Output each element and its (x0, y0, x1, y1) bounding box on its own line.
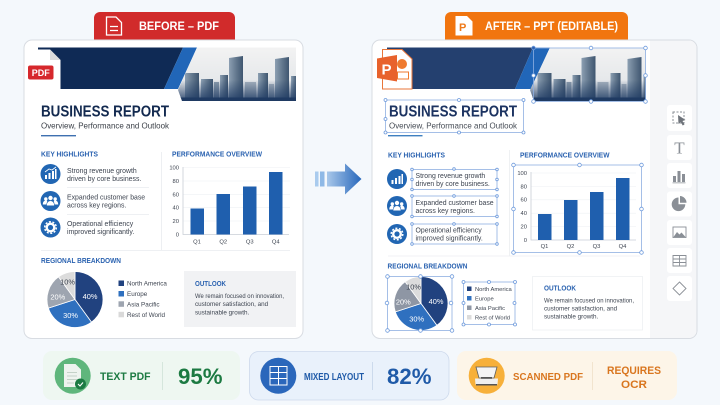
callout: outlook: sustainable growth. (195, 309, 250, 316)
banner: navy header (38, 48, 183, 89)
bar chart: performance: 0 (176, 232, 179, 238)
icon: shape (673, 282, 686, 295)
tab: after PPT: P (459, 22, 466, 34)
bar chart: performance, selected: 20 (521, 224, 527, 230)
highlight: revenue growth: driven by core business. (67, 176, 141, 183)
banner: navy header (387, 48, 533, 89)
callout: outlook: OUTLOOK (544, 284, 576, 292)
pie chart: regions, selected (385, 275, 454, 332)
icon: bar chart (672, 171, 686, 183)
legend: regions, selected: North America (475, 287, 513, 293)
legend: regions, selected (462, 280, 516, 326)
tab: before PDF (94, 12, 235, 40)
icon: scanner (469, 358, 505, 394)
highlight: customer base: across key regions. (416, 208, 475, 215)
callout: outlook: customer satisfaction, and (195, 301, 269, 308)
bar chart: performance: Q4 (272, 240, 280, 246)
badge: scanned PDF: SCANNED PDF (513, 372, 583, 383)
pie chart: regions: 20% (50, 292, 66, 302)
highlight: customer base: Expanded customer base (416, 200, 494, 207)
badge: mixed layout (250, 352, 449, 400)
callout: outlook: We remain focused on innovation, (195, 293, 284, 300)
highlight: revenue growth (387, 168, 498, 191)
bar chart: performance: 40 (173, 206, 179, 212)
bar chart: performance: Q2 (219, 240, 227, 246)
icon: image (673, 227, 686, 238)
heading: key highlights: KEY HIGHLIGHTS (41, 150, 98, 158)
subtitle: Overview, Performance and Outlook (41, 120, 170, 130)
bar chart: performance, selected: 40 (521, 211, 527, 217)
badge: text PDF: 95% (178, 364, 222, 389)
badge: scanned PDF: REQUIRES (607, 365, 661, 377)
pie chart: regions, selected: 40% (429, 297, 444, 306)
icon: text: T (674, 138, 685, 158)
icon: PowerPoint file: P (382, 62, 392, 78)
bar chart: performance, selected: 60 (521, 198, 527, 204)
callout: outlook: OUTLOOK (195, 279, 226, 288)
bar chart: performance: 60 (173, 192, 179, 198)
selection: title (384, 98, 525, 134)
icon: document check (55, 358, 91, 394)
toolbar: editing tools (667, 105, 692, 301)
bar chart: performance, selected (512, 163, 643, 254)
pie chart: regions, selected: 10% (406, 282, 421, 292)
highlight: operational efficiency: improved significantly. (67, 229, 134, 236)
heading: key highlights: KEY HIGHLIGHTS (388, 150, 445, 159)
highlight: operational efficiency (387, 223, 498, 245)
bar chart: performance: 100 (169, 166, 179, 172)
legend: regions, selected: Rest of World (475, 315, 510, 321)
icon: PDF file (28, 50, 60, 90)
panel: PDF document (24, 40, 303, 338)
callout: outlook: customer satisfaction, and (544, 306, 618, 312)
icon: PowerPoint file (377, 50, 412, 89)
legend: regions: Rest of World (127, 312, 166, 319)
highlight: operational efficiency: Operational efficiency (416, 228, 482, 234)
badge: text PDF (43, 351, 240, 400)
subtitle: Overview, Performance and Outlook (389, 120, 518, 130)
panel: PPT editable slide (372, 40, 697, 338)
highlight: operational efficiency (40, 218, 134, 238)
bar chart: performance, selected: Q3 (593, 244, 600, 250)
pie chart: regions, selected: 20% (396, 298, 411, 306)
pie chart: regions: 10% (60, 277, 75, 286)
icon: table (673, 256, 686, 266)
legend: regions (118, 280, 167, 319)
bar chart: performance (169, 166, 290, 246)
bar chart: performance, selected: Q1 (541, 244, 548, 250)
arrow: before to after (315, 164, 362, 194)
legend: regions, selected: Asia Pacific (475, 306, 505, 312)
bar chart: performance, selected: 0 (524, 238, 527, 244)
pie chart: regions: 40% (83, 292, 98, 301)
icon: layout grid (260, 358, 296, 394)
badge: scanned PDF: OCR (621, 379, 647, 391)
highlight: revenue growth: Strong revenue growth (67, 168, 137, 175)
callout: outlook: sustainable growth. (544, 314, 599, 321)
highlight: operational efficiency: Operational efficiency (67, 221, 134, 228)
heading: performance overview: PERFORMANCE OVERVIEW (172, 150, 263, 158)
highlight: revenue growth: driven by core business. (416, 181, 490, 188)
callout: outlook (184, 271, 296, 327)
title: BUSINESS REPORT (41, 104, 169, 120)
bar chart: performance: Q3 (246, 240, 254, 246)
bar chart: performance, selected: 100 (517, 171, 527, 177)
highlight: customer base: across key regions. (67, 202, 126, 210)
heading: regional breakdown: REGIONAL BREAKDOWN (41, 256, 121, 265)
bar chart: performance: Q1 (193, 240, 201, 246)
highlight: customer base (40, 191, 145, 211)
selection: banner photo (532, 46, 647, 103)
icon: select (673, 112, 686, 126)
banner: blue stripe (164, 48, 197, 89)
legend: regions: North America (127, 281, 167, 288)
title: BUSINESS REPORT (389, 104, 517, 120)
bar chart: performance: 20 (173, 219, 179, 225)
pie chart: regions, selected: 30% (409, 315, 425, 324)
tab: before PDF: BEFORE – PDF (139, 21, 219, 33)
legend: regions: Asia Pacific (127, 302, 160, 308)
banner: city skyline photo (176, 47, 298, 102)
highlight: customer base (387, 195, 498, 218)
bar chart: performance, selected: Q4 (619, 244, 627, 250)
banner: blue stripe (515, 48, 550, 89)
callout: outlook: We remain focused on innovation, (544, 298, 634, 304)
pie chart: regions: 30% (63, 311, 78, 320)
badge: text PDF: TEXT PDF (100, 371, 151, 383)
heading: regional breakdown: REGIONAL BREAKDOWN (388, 262, 468, 271)
legend: regions: Europe (127, 291, 148, 298)
badge: mixed layout: 82% (387, 364, 432, 389)
badge: scanned PDF (457, 351, 677, 400)
callout: outlook (532, 276, 642, 330)
banner: city skyline photo (528, 47, 650, 102)
tab: after PPT: AFTER – PPT (EDITABLE) (485, 21, 618, 33)
bar chart: performance, selected: 80 (521, 184, 527, 190)
heading: performance overview: PERFORMANCE OVERVIEW (520, 150, 610, 159)
highlight: operational efficiency: improved significantly. (416, 236, 483, 242)
highlight: revenue growth: Strong revenue growth (416, 173, 485, 180)
icon: PDF file: PDF (32, 68, 50, 78)
bar chart: performance, selected: Q2 (567, 244, 574, 250)
pie chart: regions (47, 272, 103, 327)
highlight: revenue growth (40, 164, 141, 184)
icon: pie (672, 196, 687, 211)
legend: regions, selected: Europe (475, 297, 494, 303)
bar chart: performance: 80 (173, 179, 179, 185)
toolbar background (650, 40, 696, 338)
badge: mixed layout: MIXED LAYOUT (304, 372, 364, 383)
tab: after PPT (445, 12, 628, 40)
highlight: customer base: Expanded customer base (67, 194, 145, 202)
